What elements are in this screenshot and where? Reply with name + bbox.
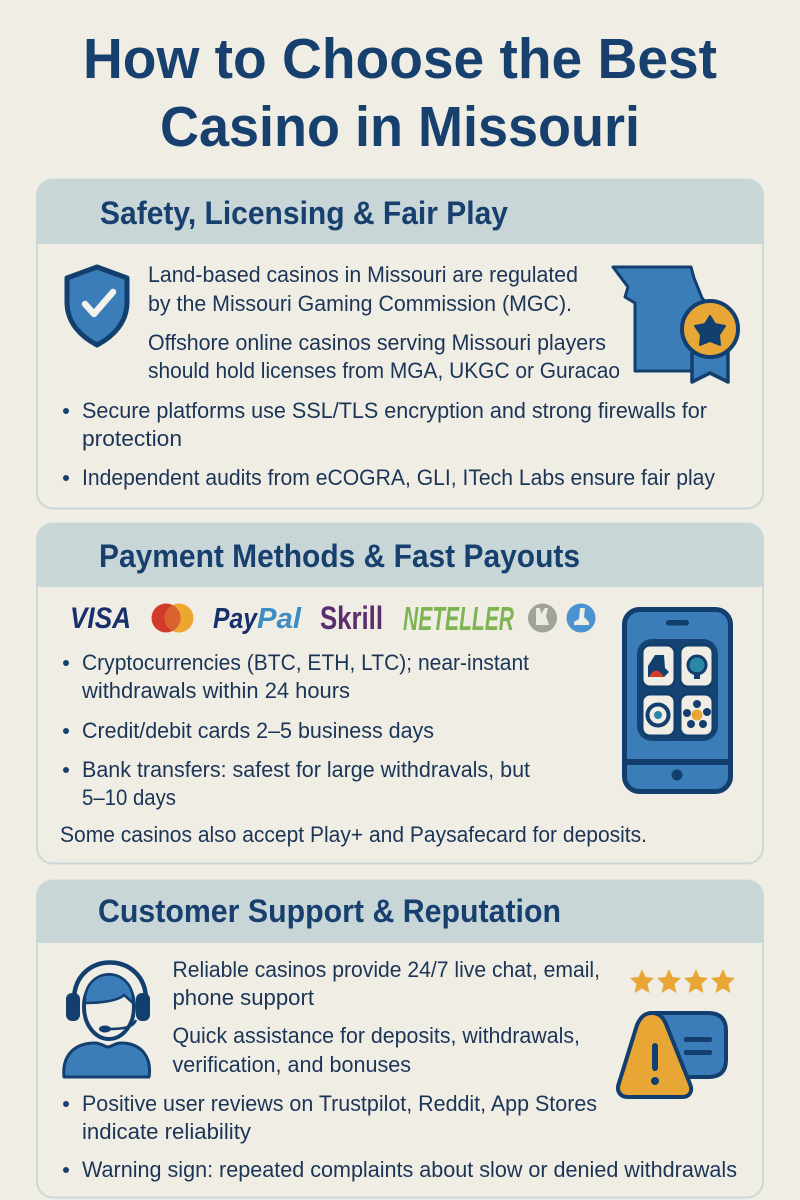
text: support paragraphs: phone support bbox=[172, 985, 315, 1010]
title bbox=[83, 27, 717, 159]
logos: payment brands: VISA bbox=[70, 602, 131, 635]
panel: safety, licensing and fair play bbox=[37, 180, 763, 508]
text: support paragraphs bbox=[172, 957, 600, 1077]
text: other deposit options: Some casinos also accept Play+ and Paysafecard for deposits. bbox=[60, 822, 647, 847]
text: support paragraphs: Quick assistance for deposits, withdrawals, bbox=[172, 1023, 580, 1048]
text: licensing paragraphs: should hold licenses from MGA, UKGC or Guracao bbox=[148, 358, 620, 383]
list: payout times: withdrawals within 24 hours bbox=[81, 678, 350, 703]
list: security and audits bbox=[63, 398, 716, 490]
panel: payment methods and fast payouts bbox=[37, 524, 763, 864]
list: security and audits: protection bbox=[82, 426, 182, 451]
icon: four rating stars bbox=[630, 969, 735, 993]
heading: support: Customer Support & Reputation bbox=[98, 893, 561, 929]
icon: smartphone with app tiles bbox=[624, 610, 731, 792]
heading: payments: Payment Methods & Fast Payouts bbox=[99, 538, 580, 574]
text: support paragraphs: verification, and bonuses bbox=[172, 1052, 411, 1077]
title: How to Choose the Best bbox=[83, 27, 717, 91]
list: payout times: Bank transfers: safest for large withdravals, but bbox=[82, 757, 531, 782]
list: reviews and warning signs bbox=[63, 1091, 737, 1182]
icon: Missouri map with award badge bbox=[613, 267, 738, 382]
list: security and audits: Secure platforms use SSL/TLS encryption and strong firewalls for bbox=[82, 398, 707, 423]
logos: payment brands: Skrill bbox=[320, 600, 383, 636]
text: licensing paragraphs: by the Missouri Gaming Commission (MGC). bbox=[148, 291, 572, 316]
icon: support agent with headset bbox=[64, 962, 150, 1077]
logos: payment brands: Pal bbox=[257, 603, 302, 635]
text: support paragraphs: Reliable casinos provide 24/7 live chat, email, bbox=[172, 957, 600, 982]
logos: payment brands bbox=[70, 600, 596, 637]
icon: warning triangle with message bubble bbox=[618, 1013, 726, 1097]
list: reviews and warning signs: indicate reliability bbox=[82, 1119, 252, 1144]
list: payout times: Credit/debit cards 2–5 business days bbox=[82, 718, 434, 743]
heading: safety: Safety, Licensing & Fair Play bbox=[100, 195, 508, 231]
icon: shield with check bbox=[67, 267, 127, 345]
text: licensing paragraphs: Land-based casinos in Missouri are regulated bbox=[148, 262, 578, 287]
list: payout times bbox=[63, 650, 531, 810]
list: payout times: Cryptocurrencies (BTC, ETH, LTC); near-instant bbox=[82, 650, 530, 675]
text: licensing paragraphs bbox=[148, 262, 620, 383]
list: reviews and warning signs: Positive user reviews on Trustpilot, Reddit, App Stores bbox=[82, 1091, 597, 1116]
text: licensing paragraphs: Offshore online casinos serving Missouri players bbox=[148, 330, 606, 355]
list: security and audits: Independent audits from eCOGRA, GLI, ITech Labs ensure fair play bbox=[82, 465, 716, 490]
list: payout times: 5–10 days bbox=[82, 785, 176, 810]
logos: payment brands: NETELLER bbox=[403, 600, 514, 637]
panel: customer support and reputation bbox=[37, 880, 763, 1198]
list: reviews and warning signs: Warning sign: repeated complaints about slow or denied withdrawals bbox=[82, 1157, 737, 1182]
logos: payment brands: Pay bbox=[213, 603, 259, 635]
title: Casino in Missouri bbox=[160, 95, 640, 159]
